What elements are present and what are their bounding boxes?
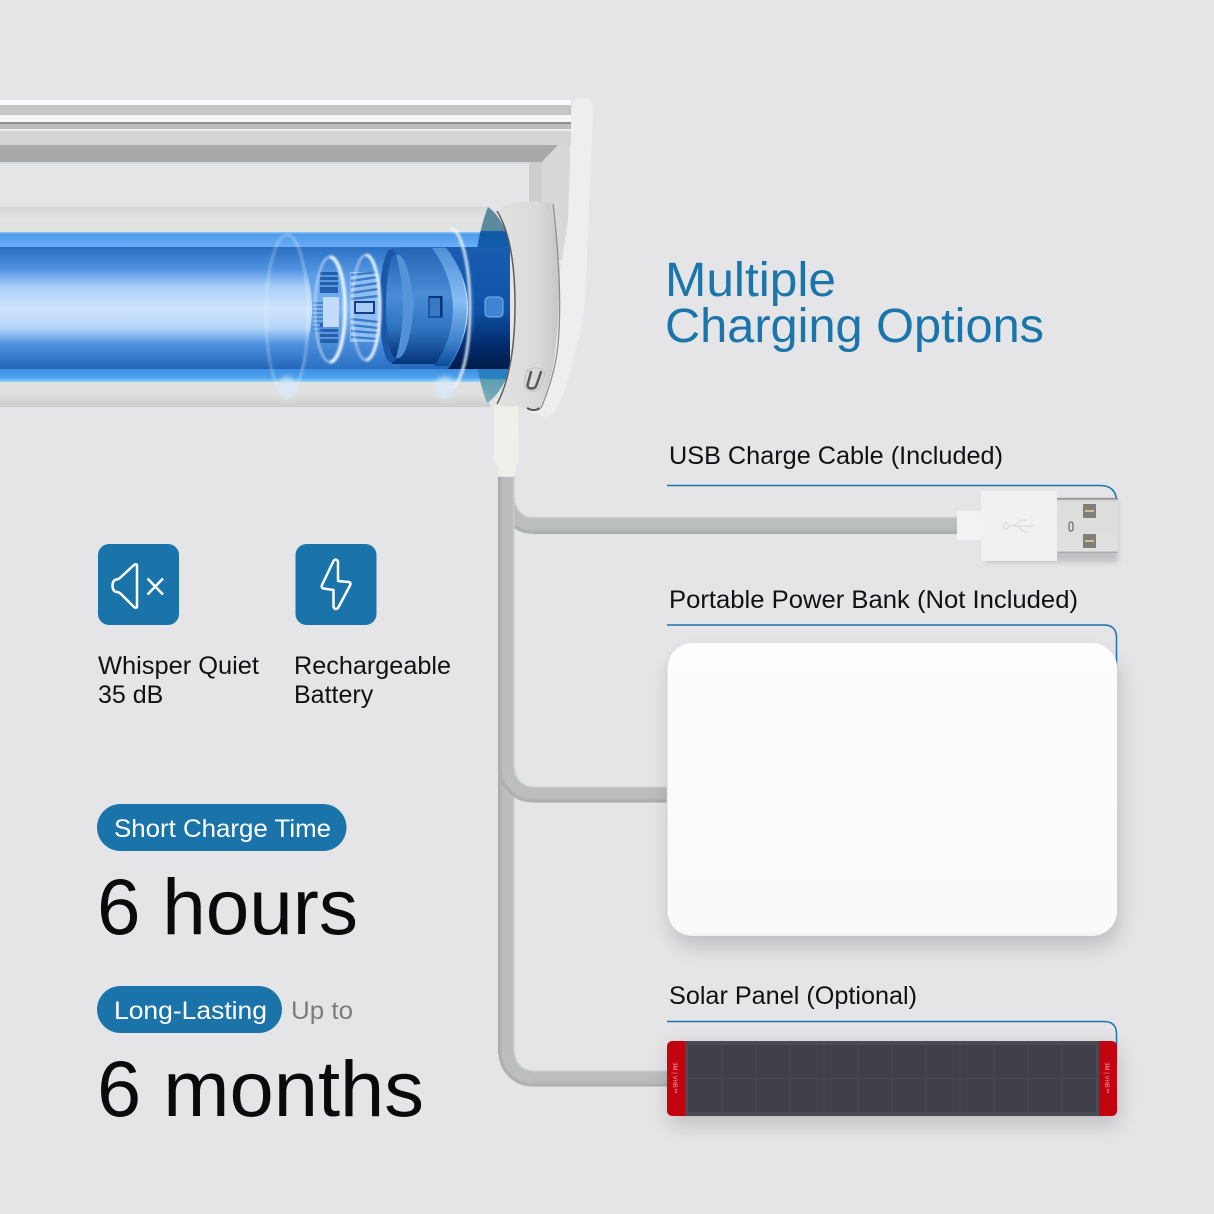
label: power bank: Portable Power Bank (Not Included) xyxy=(669,586,1078,614)
roller tube xyxy=(0,207,490,407)
connector cap xyxy=(497,202,559,409)
pill: Long-Lasting xyxy=(114,997,267,1025)
text: rechargeable battery: Rechargeable xyxy=(294,652,451,680)
illustration: roller shade motor xyxy=(0,98,593,417)
dark motor rear xyxy=(446,247,474,369)
text: whisper quiet: 35 dB xyxy=(98,681,163,709)
pill: Short Charge Time xyxy=(114,815,331,843)
heading xyxy=(665,254,1044,353)
feature: rechargeable battery xyxy=(294,544,451,709)
value: 6 hours: 6 hours xyxy=(97,862,358,951)
feature: whisper quiet xyxy=(98,544,259,709)
light collar xyxy=(432,248,467,366)
gear one xyxy=(313,272,339,343)
motor ring xyxy=(392,248,455,364)
cable network xyxy=(498,477,958,1086)
option: USB charge cable xyxy=(667,442,1118,562)
headrail xyxy=(0,100,571,164)
value: 6 months: 6 months xyxy=(97,1044,424,1133)
heading: Multiple xyxy=(665,254,836,307)
motor body xyxy=(0,247,510,369)
power bank body xyxy=(666,643,1120,947)
gear two xyxy=(350,272,378,342)
bracket end plate xyxy=(530,98,593,417)
stat: long-lasting xyxy=(97,986,424,1133)
text: rechargeable battery: Battery xyxy=(294,681,374,709)
label: USB: USB Charge Cable (Included) xyxy=(669,442,1003,470)
USB connector at motor xyxy=(494,404,519,477)
option: portable power bank xyxy=(666,586,1120,947)
gear bay xyxy=(300,271,400,369)
blue motor band xyxy=(0,232,505,382)
text: whisper quiet: Whisper Quiet xyxy=(98,652,259,680)
cable: trunk xyxy=(498,477,514,1055)
icon: muted speaker xyxy=(98,544,179,625)
USB plug xyxy=(957,491,1118,562)
cable: power bank branch xyxy=(506,768,667,802)
pill xyxy=(97,986,282,1033)
icon: lightning bolt xyxy=(296,544,376,625)
stat: short charge time xyxy=(97,804,358,951)
motor key xyxy=(485,297,503,317)
option: solar panel xyxy=(667,982,1119,1126)
ripple glow xyxy=(278,377,455,399)
charging port xyxy=(524,368,545,391)
bracket arm xyxy=(529,160,570,260)
pill xyxy=(97,804,346,851)
label: solar: Solar Panel (Optional) xyxy=(669,982,917,1010)
tube end opening xyxy=(473,207,510,403)
sound ripples xyxy=(266,228,470,395)
heading: Charging Options xyxy=(665,300,1044,353)
cable: USB branch xyxy=(506,497,958,534)
qualifier: Up to xyxy=(291,997,353,1025)
solar panel body: 3M | VHB™ xyxy=(1103,1062,1110,1094)
cable: solar branch xyxy=(506,1052,667,1086)
solar panel body xyxy=(667,1041,1119,1126)
solar panel body: 3M | VHB™ xyxy=(671,1062,678,1094)
